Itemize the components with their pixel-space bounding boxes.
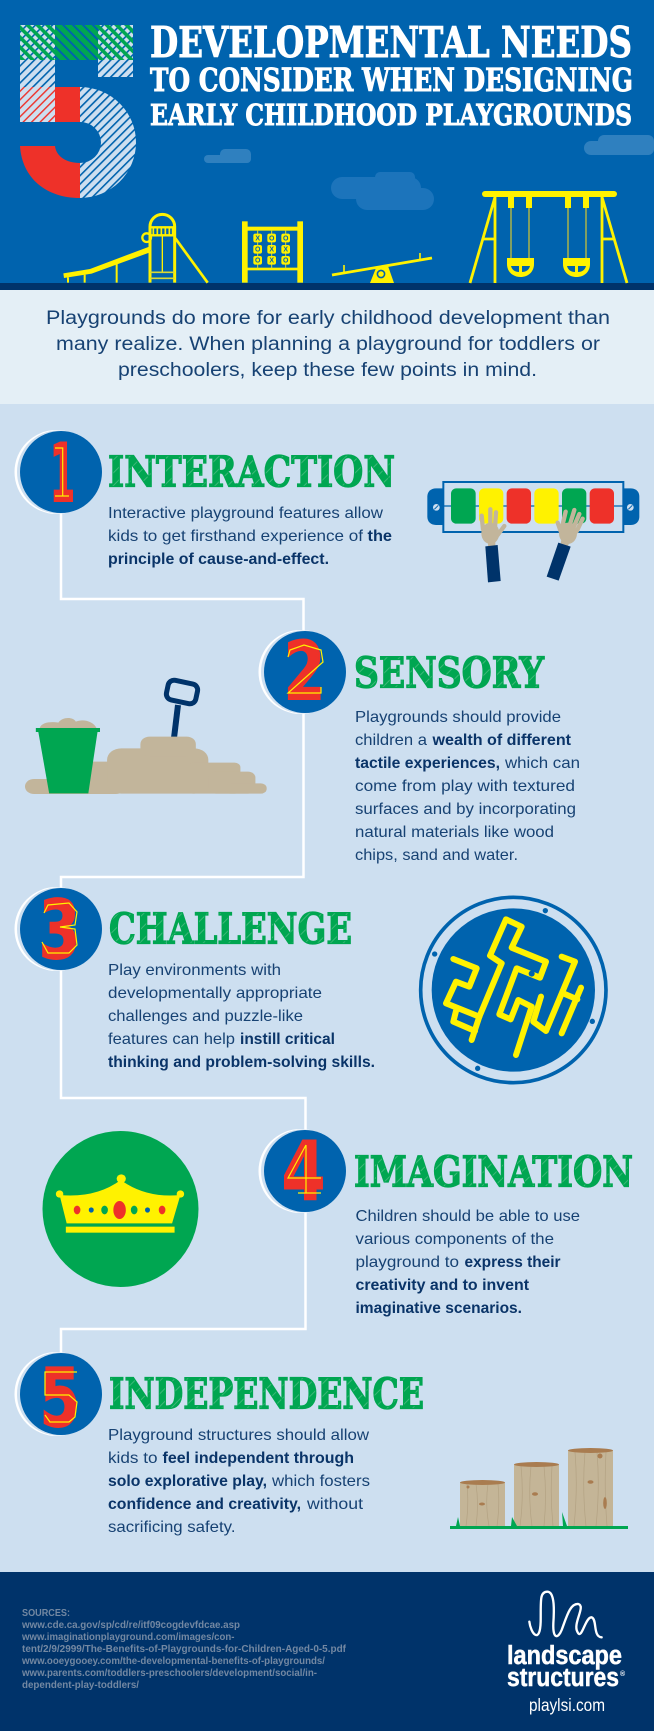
text: sensory: surfaces and by incorporating [355, 801, 576, 818]
text: imagination: express their [464, 1254, 560, 1271]
text: independence: feel independent through [162, 1450, 354, 1467]
text: interaction: the [368, 528, 392, 545]
text: challenge: thinking and problem-solving skills. [108, 1054, 375, 1071]
text: imagination [356, 1208, 580, 1317]
badge 1 [14, 427, 102, 520]
icon: swing set [470, 191, 627, 283]
sources: www.imaginationplayground.com/images/con- [21, 1631, 235, 1643]
intro text: preschoolers, keep these few points in mind. [118, 360, 537, 381]
intro text: Playgrounds do more for early childhood development than [46, 308, 610, 329]
icon: maze panel [421, 897, 606, 1083]
intro text [46, 308, 610, 381]
icon: tic tac toe panel: X [269, 258, 274, 265]
badge 2: 2 [284, 625, 325, 718]
icon: seesaw [332, 253, 432, 283]
badge 3 [14, 884, 102, 977]
section 3: challenge [14, 884, 606, 1083]
text: challenge: challenges and puzzle-like [108, 1008, 303, 1025]
heading: sensory: SENSORY [354, 648, 545, 698]
text: interaction [108, 505, 392, 568]
text: sensory: come from play with textured [355, 778, 575, 795]
text: independence: which fosters [271, 1473, 370, 1490]
text: sensory: tactile experiences, [355, 755, 500, 772]
sources [21, 1607, 346, 1691]
connector path [61, 513, 306, 1358]
text: sensory: natural materials like wood [355, 824, 554, 841]
text: independence: Playground structures should allow [108, 1427, 369, 1444]
text: sensory [355, 709, 580, 864]
heading: challenge: CHALLENGE [109, 904, 352, 954]
text: challenge [108, 962, 375, 1071]
icon: tic tac toe panel: O [255, 247, 261, 254]
icon: tic tac toe panel: O [283, 235, 289, 242]
icon: tic tac toe panel: X [255, 235, 260, 242]
text: challenge: features can help [108, 1031, 235, 1048]
text: imagination: imaginative scenarios. [356, 1300, 522, 1317]
logo: landscape structures: structures [507, 1664, 619, 1692]
badge 3: 3 [39, 884, 80, 977]
icon: tic tac toe panel: O [269, 235, 275, 242]
icon: tic tac toe panel [242, 221, 303, 283]
text: challenge: Play environments with [108, 962, 281, 979]
badge 4: 4 [282, 1125, 325, 1218]
ground band [0, 283, 654, 290]
text: interaction: kids to get firsthand experience of [108, 528, 364, 545]
text: independence: solo explorative play, [108, 1473, 267, 1490]
logo: landscape structures [507, 1592, 626, 1715]
text: sensory: chips, sand and water. [355, 847, 518, 864]
title [150, 18, 633, 132]
section 2: sensory [25, 625, 580, 864]
badge 5: 5 [40, 1352, 80, 1445]
text: sensory: children a [355, 732, 427, 749]
main panel background [0, 404, 654, 1572]
section 4: imagination [42, 1125, 633, 1317]
sources: www.cde.ca.gov/sp/cd/re/itf09cogdevfdcae.asp [21, 1619, 240, 1631]
icon: tic tac toe panel: X [283, 247, 288, 254]
sources: tent/2/9/2999/The-Benefits-of-Playgrounds-for-Children-Aged-0-5.pdf [22, 1643, 346, 1655]
text: sensory: Playgrounds should provide [355, 709, 561, 726]
section 1: interaction [14, 427, 639, 582]
text: sensory: wealth of different [431, 732, 572, 749]
text: imagination: Children should be able to use [356, 1208, 580, 1225]
sources: SOURCES: [22, 1607, 70, 1619]
intro text: many realize. When planning a playground for toddlers or [56, 334, 601, 355]
text: independence: sacrificing safety. [108, 1519, 236, 1536]
intro band [0, 290, 654, 404]
icon: tic tac toe panel: X [269, 247, 274, 254]
big numeral 5 graphic [20, 25, 136, 198]
text: independence: confidence and creativity, [108, 1496, 301, 1513]
sources: www.ooeygooey.com/the-developmental-benefits-of-playgrounds/ [21, 1655, 325, 1667]
logo: landscape structures: landscape [507, 1642, 622, 1670]
header background [0, 0, 654, 283]
text: interaction: Interactive playground features allow [108, 505, 383, 522]
text: challenge: instill critical [240, 1031, 335, 1048]
text: imagination: creativity and to invent [356, 1277, 530, 1294]
badge 4 [258, 1125, 346, 1218]
text: imagination: playground to [356, 1254, 459, 1271]
badge 1: 1 [50, 427, 75, 520]
text: sensory: which can [504, 755, 580, 772]
text: independence: kids to [108, 1450, 158, 1467]
icon: button panel with hands [427, 482, 639, 582]
text: independence: without [306, 1496, 364, 1513]
icon: sand bucket and shovel [25, 679, 267, 794]
heading: interaction: INTERACTION [108, 448, 395, 496]
text: imagination: various components of the [356, 1231, 554, 1248]
clouds [204, 135, 654, 210]
badge 5 [14, 1352, 102, 1445]
icon: tic tac toe panel: O [255, 258, 261, 265]
logo: landscape structures: playlsi.com [529, 1695, 605, 1715]
icon: tic tac toe panel: O [283, 258, 289, 265]
icon: crown in green circle [42, 1131, 198, 1287]
heading: independence: INDEPENDENCE [109, 1370, 424, 1418]
sources: dependent-play-toddlers/ [22, 1679, 139, 1691]
icon: slide [63, 214, 208, 283]
text: challenge: developmentally appropriate [108, 985, 322, 1002]
footer background [0, 1572, 654, 1731]
text: independence [108, 1427, 370, 1536]
sources: www.parents.com/toddlers-preschoolers/development/social/in- [21, 1667, 317, 1679]
text: interaction: principle of cause-and-effect. [108, 551, 329, 568]
logo: landscape structures: ® [620, 1670, 626, 1678]
section 5: independence [14, 1352, 628, 1536]
icon: tree stumps [450, 1448, 628, 1529]
badge 2 [258, 625, 346, 718]
